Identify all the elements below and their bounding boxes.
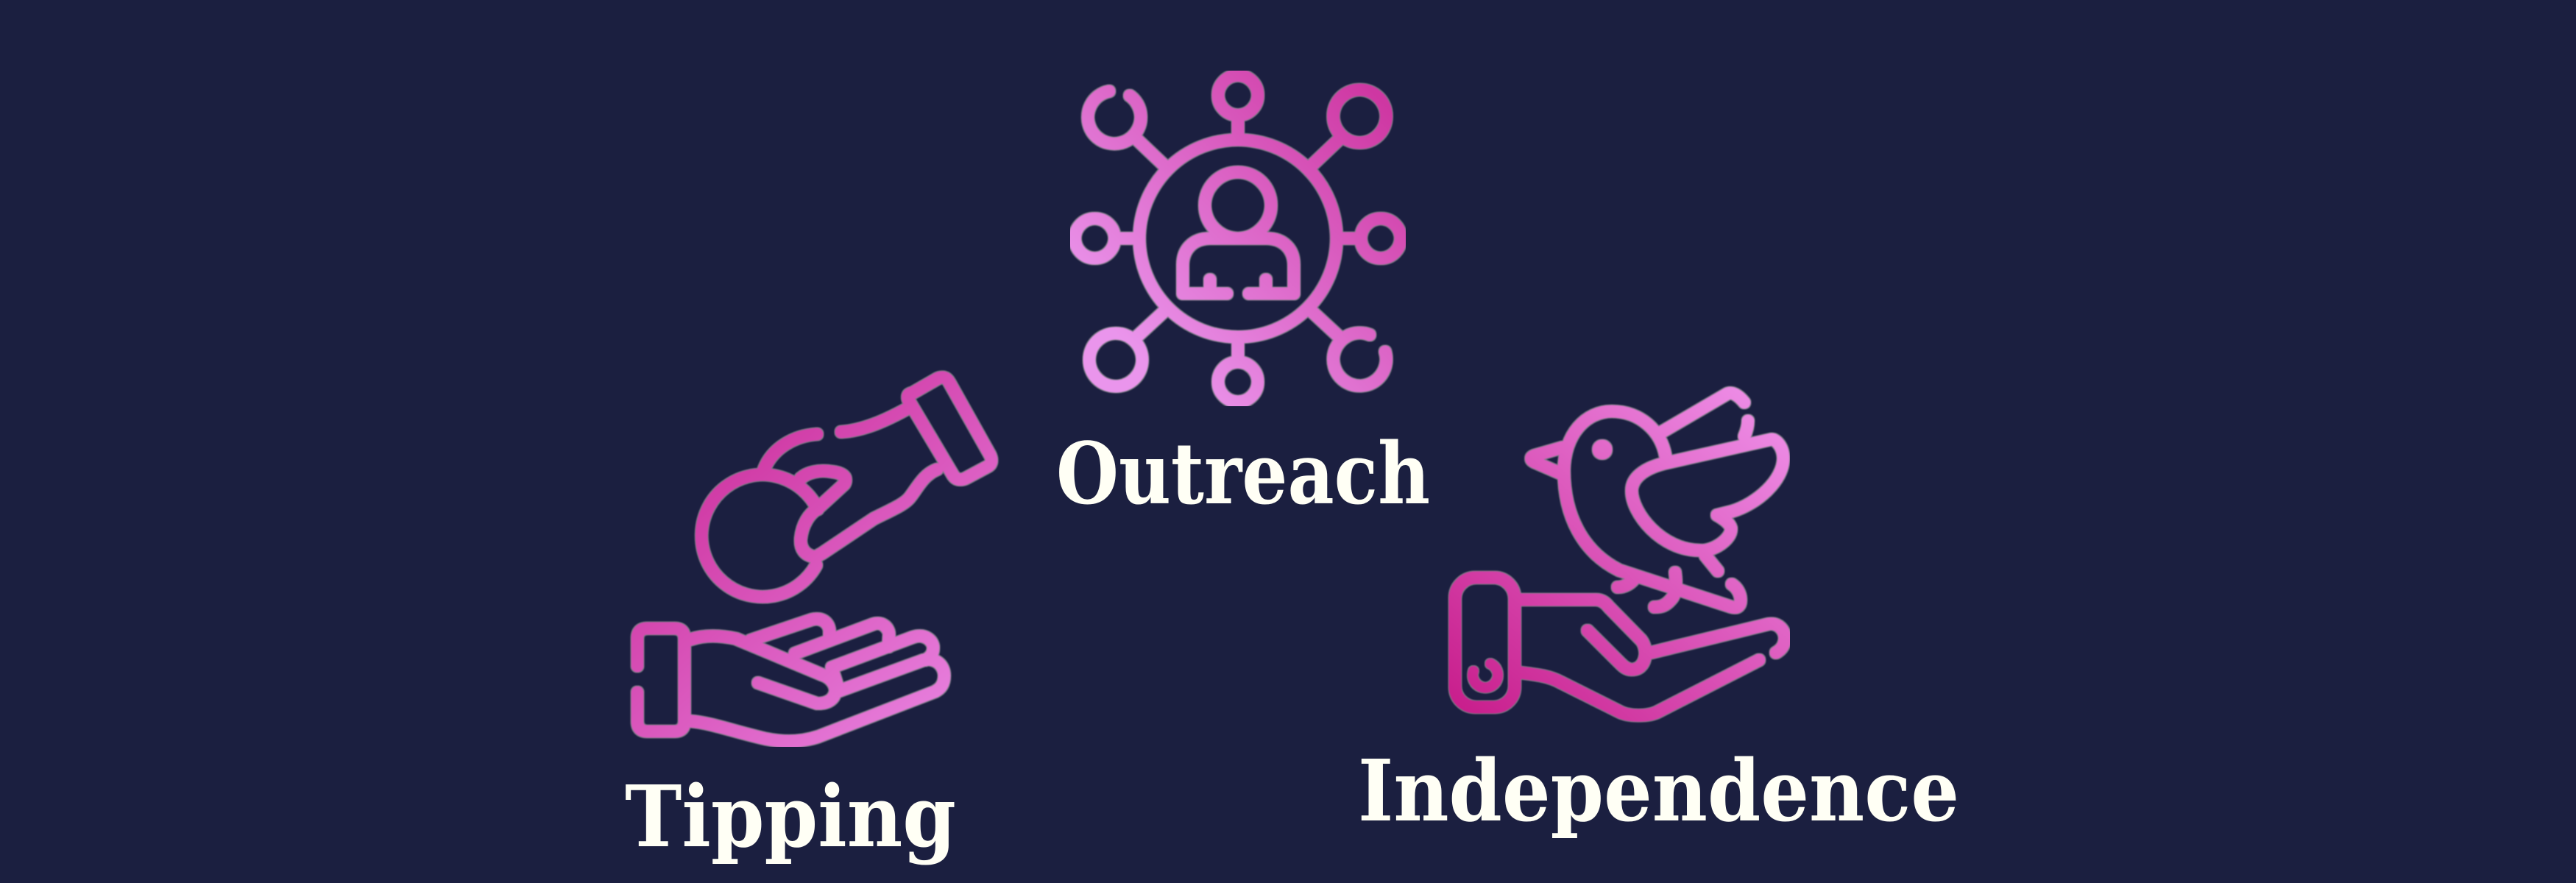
label: Independence: Independence	[1358, 742, 1959, 841]
bird	[1531, 393, 1783, 608]
person	[1183, 172, 1294, 294]
icon: tipping hands	[637, 377, 991, 741]
open hand	[1455, 578, 1785, 715]
icon: outreach network	[1075, 75, 1401, 402]
satellite nodes	[1075, 75, 1401, 402]
giving hand	[764, 377, 991, 557]
icon: bird on hand	[1455, 393, 1785, 715]
central ring	[1139, 140, 1337, 337]
label: Tipping: Tipping	[625, 767, 956, 867]
connectors	[1116, 116, 1360, 361]
coin	[701, 475, 818, 597]
label: Outreach: Outreach	[1056, 425, 1430, 524]
receiving hand	[637, 619, 944, 741]
